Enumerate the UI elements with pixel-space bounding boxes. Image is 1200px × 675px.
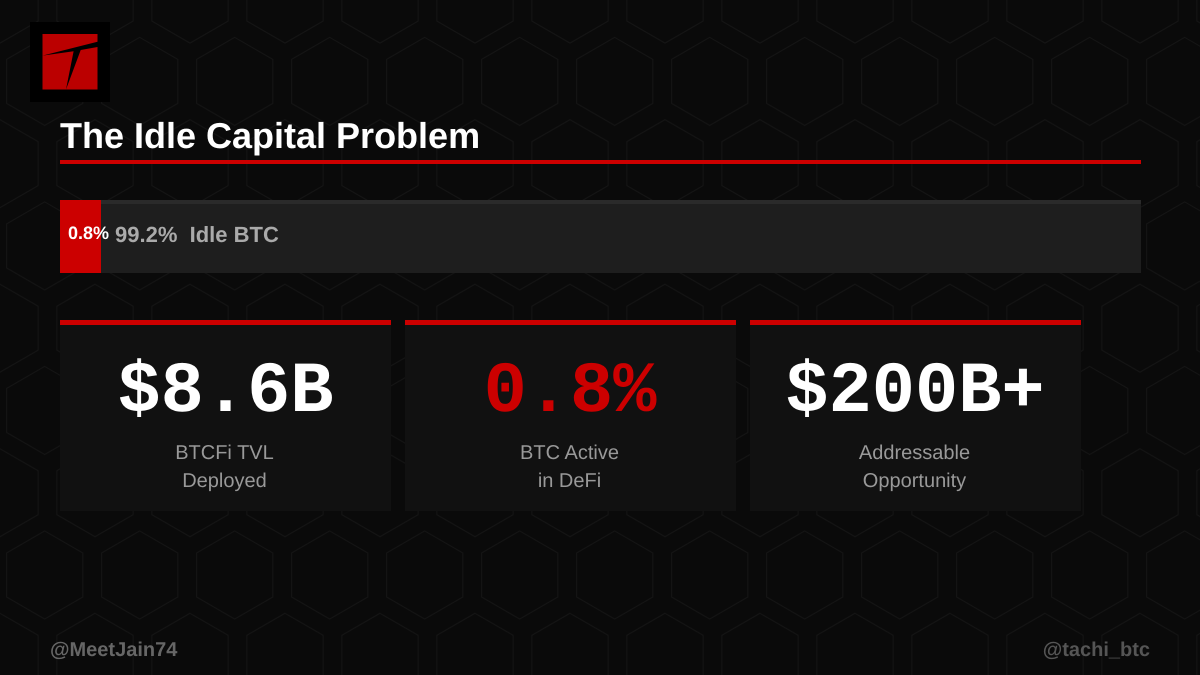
- panel: BTCFi TVL: [60, 320, 391, 511]
- progress bar: idle BTC share: [60, 200, 1141, 273]
- footer handle right: @tachi_btc: [1043, 639, 1150, 661]
- stat label: BTCFi TVL: [175, 442, 274, 464]
- stat value: 0.8%: [484, 351, 656, 433]
- stat label: Addressable: [859, 442, 970, 464]
- bar label: active percent: 0.8%: [68, 223, 109, 243]
- stat label: [520, 442, 619, 492]
- stat value: $8.6B: [117, 351, 334, 433]
- panel: BTC active in DeFi: [405, 320, 736, 511]
- footer handle left: @MeetJain74: [50, 639, 177, 661]
- bar segment: active 0.8%: [60, 200, 101, 273]
- stat label: BTC Active: [520, 442, 619, 464]
- title: The Idle Capital Problem: [60, 115, 480, 156]
- stat label: [859, 442, 970, 492]
- stat label: [175, 442, 274, 492]
- icon: logo: [30, 22, 110, 102]
- panel: addressable opportunity: [750, 320, 1081, 511]
- stat label: Deployed: [182, 470, 267, 492]
- stat label: Opportunity: [863, 470, 966, 492]
- bar label: idle percent: 99.2% Idle BTC: [115, 222, 279, 247]
- title underline: [60, 160, 1141, 164]
- stat value: $200B+: [785, 351, 1045, 433]
- stat label: in DeFi: [538, 470, 601, 492]
